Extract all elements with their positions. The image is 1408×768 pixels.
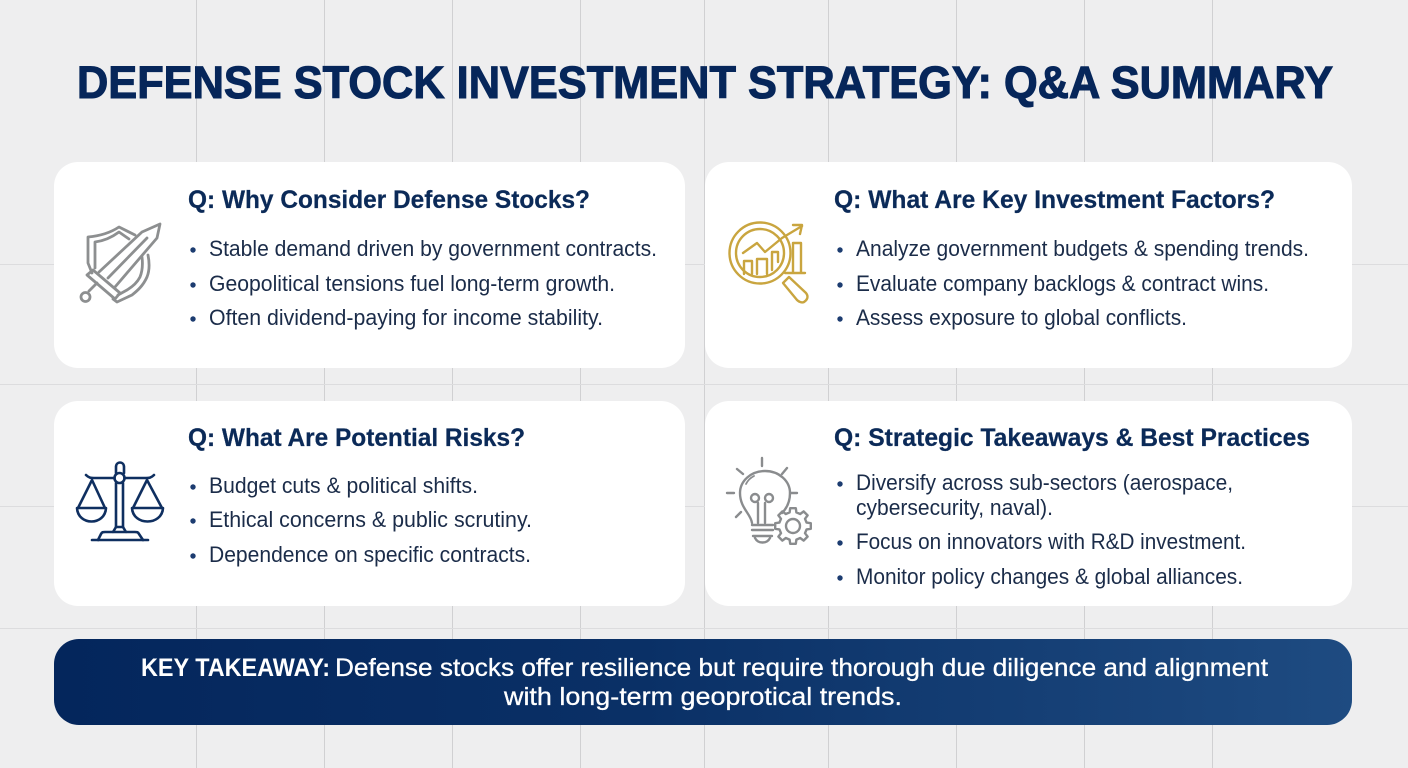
bullet list: Stable demand driven by government contracts. [209, 236, 657, 261]
bullet list: Budget cuts & political shifts. [209, 473, 478, 498]
bullet list [190, 236, 657, 330]
bullet list: Often dividend-paying for income stability. [209, 305, 603, 330]
icon: balance scale [77, 462, 163, 540]
bullet list: Focus on innovators with R&D investment. [856, 529, 1246, 554]
icon: shield and sword [81, 224, 160, 302]
bullet list [190, 473, 532, 567]
heading: Q: Strategic Takeaways & Best Practices [834, 424, 1310, 452]
panel: why consider defense stocks [54, 162, 685, 368]
icon: magnifying glass with chart [730, 222, 807, 302]
bullet list: Monitor policy changes & global alliances. [856, 564, 1243, 589]
bullet list: Diversify across sub-sectors (aerospace, [856, 470, 1233, 495]
bullet list: Geopolitical tensions fuel long-term growth. [209, 271, 615, 296]
heading: Q: What Are Key Investment Factors? [834, 186, 1275, 214]
callout: key takeaway [54, 639, 1352, 725]
bullet list: Assess exposure to global conflicts. [856, 305, 1187, 330]
bullet list [837, 236, 1309, 330]
bullet list: Analyze government budgets & spending trends. [856, 236, 1309, 261]
title: DEFENSE STOCK INVESTMENT STRATEGY: Q&A SUMMARY [77, 57, 1333, 108]
panel: strategic takeaways [705, 401, 1352, 606]
bullet list: cybersecurity, naval). [856, 495, 1053, 520]
icon: light bulb with gear [727, 458, 811, 544]
bullet list: Evaluate company backlogs & contract wins. [856, 271, 1269, 296]
bullet list: Ethical concerns & public scrutiny. [209, 507, 532, 532]
panel: key investment factors [705, 162, 1352, 368]
takeaway text: with long-term geoprotical trends. [503, 683, 902, 711]
bullet list [837, 470, 1246, 589]
takeaway text: Defense stocks offer resilience but require thorough due diligence and alignment [335, 654, 1268, 682]
heading: Q: What Are Potential Risks? [188, 424, 525, 452]
panel: potential risks [54, 401, 685, 606]
bullet list: Dependence on specific contracts. [209, 542, 531, 567]
takeaway text [141, 654, 1268, 711]
heading: Q: Why Consider Defense Stocks? [188, 186, 590, 214]
takeaway text: KEY TAKEAWAY: [141, 654, 330, 682]
